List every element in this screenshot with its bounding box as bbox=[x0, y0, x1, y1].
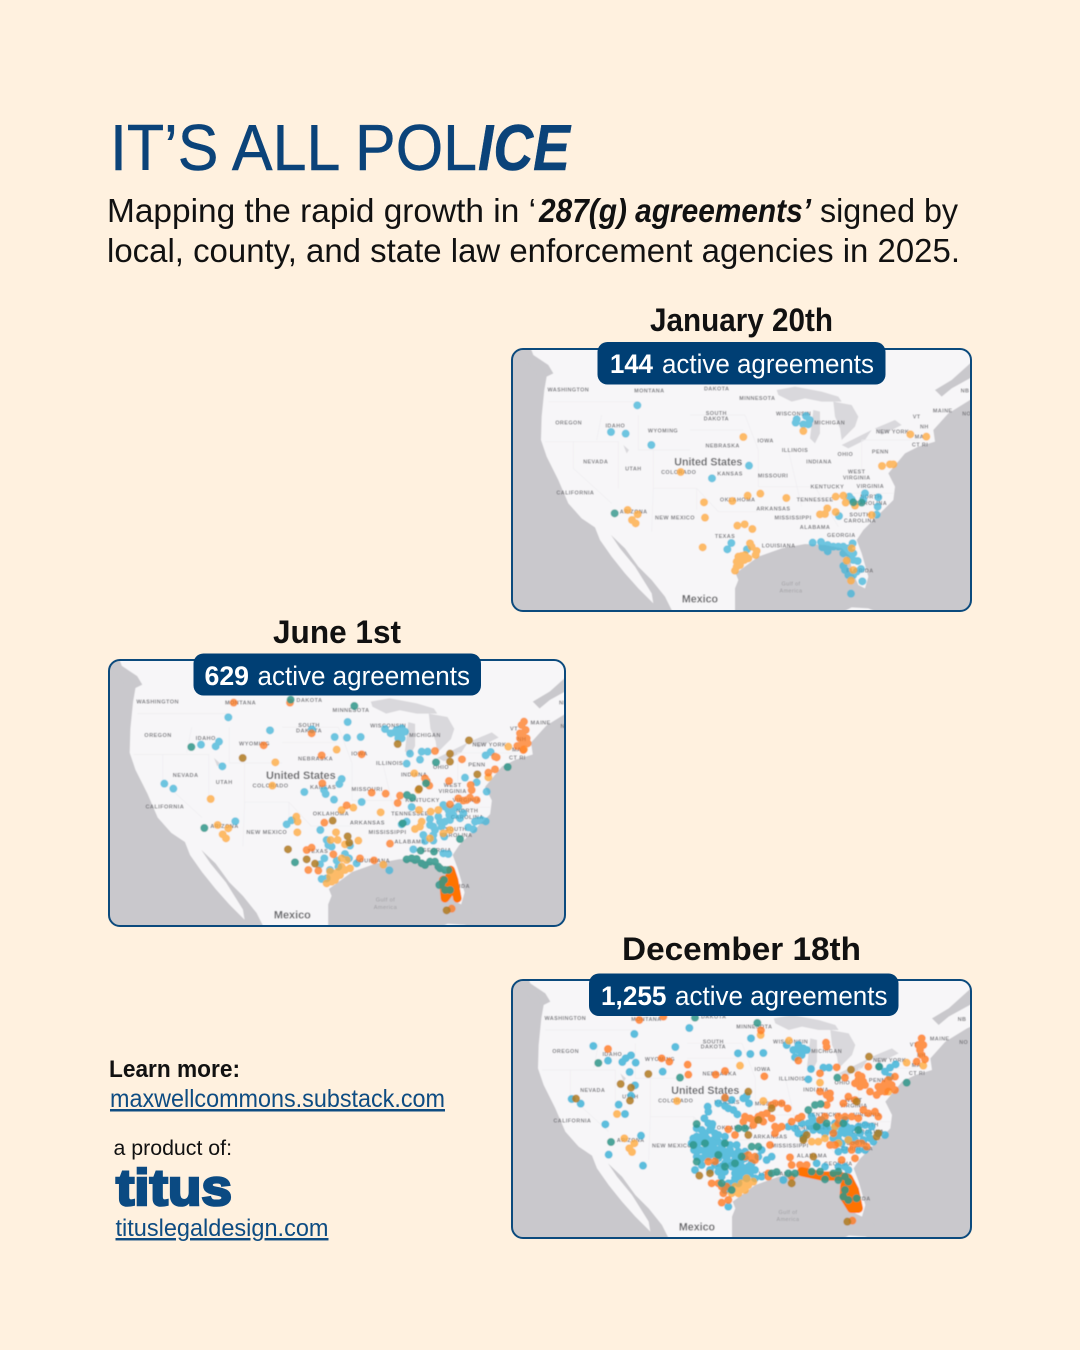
state labels: CALIFORNIA bbox=[556, 490, 594, 496]
state labels: IOWA bbox=[351, 752, 368, 758]
state labels: DAKOTA bbox=[704, 386, 729, 392]
state labels: WYOMING bbox=[648, 429, 678, 435]
state labels: CT RI bbox=[909, 1071, 925, 1077]
state labels: TENNESSEE bbox=[391, 811, 429, 817]
state labels: KENTUCKY bbox=[810, 484, 844, 490]
state labels: Gulf of bbox=[782, 582, 801, 588]
state labels: GEORGIA bbox=[827, 533, 856, 539]
pill: 629 active agreements bbox=[194, 654, 481, 696]
state labels: DAKOTA bbox=[704, 416, 729, 422]
state labels: America bbox=[780, 589, 803, 595]
state labels: TEXAS bbox=[308, 849, 328, 855]
state labels: OKLAHOMA bbox=[313, 811, 349, 817]
subtitle: Mapping the rapid growth in ‘ bbox=[107, 193, 536, 230]
state labels: United States bbox=[671, 1085, 739, 1097]
state labels: OHIO bbox=[835, 1080, 850, 1086]
state labels: WASHINGTON bbox=[136, 699, 179, 705]
state labels: MONTANA bbox=[634, 389, 665, 395]
state labels: WISCONSIN bbox=[370, 724, 406, 730]
state labels: WISCONSIN bbox=[773, 1040, 808, 1046]
state labels: KANSAS bbox=[310, 785, 336, 791]
state labels: NO bbox=[959, 1040, 969, 1046]
panel: December map bbox=[511, 974, 972, 1239]
state labels: NEVADA bbox=[173, 773, 198, 779]
agreement dots bbox=[164, 700, 528, 910]
state labels: NORTH bbox=[857, 1123, 879, 1129]
state labels: ARKANSAS bbox=[350, 821, 385, 827]
state labels: SOUTH bbox=[706, 411, 727, 417]
state labels: CAROLINA bbox=[440, 833, 472, 839]
state labels: ARKANSAS bbox=[756, 506, 790, 512]
title: IT’S ALL POL bbox=[110, 112, 477, 184]
state labels: SOUTH bbox=[298, 723, 320, 729]
subtitle: signed by bbox=[820, 193, 958, 230]
state labels: CAROLINA bbox=[852, 1129, 884, 1135]
state labels bbox=[136, 698, 570, 922]
state labels: NB bbox=[961, 389, 969, 395]
state labels: WISCONSIN bbox=[776, 411, 811, 417]
pill: 1,255 active agreements: 1,255 bbox=[601, 981, 666, 1011]
state labels: NO bbox=[962, 412, 972, 418]
state labels: America bbox=[374, 905, 398, 911]
heading: January 20th: January 20th bbox=[650, 302, 833, 338]
state labels: NEBRASKA bbox=[298, 756, 333, 762]
panel: January map bbox=[511, 342, 972, 612]
state labels: UTAH bbox=[625, 466, 642, 472]
state labels: MINNESOTA bbox=[333, 708, 369, 714]
agreement dots bbox=[611, 405, 926, 594]
state labels: LOUISIANA bbox=[759, 1172, 793, 1178]
state labels: OHIO bbox=[433, 765, 449, 771]
base map bbox=[513, 350, 970, 610]
state labels: ARIZONA bbox=[210, 824, 239, 830]
state labels: VT bbox=[910, 1043, 918, 1049]
pill: 1,255 active agreements bbox=[589, 974, 898, 1016]
state labels: MISSOURI bbox=[755, 1102, 785, 1108]
state labels: DAKOTA bbox=[701, 1015, 726, 1021]
state labels: VIRGINIA bbox=[452, 798, 481, 804]
state labels: LOUISIANA bbox=[762, 543, 796, 549]
state labels: MONTANA bbox=[631, 1017, 662, 1023]
state labels: NH bbox=[517, 737, 526, 743]
state labels: PENN bbox=[468, 763, 485, 769]
state labels: FLORIDA bbox=[843, 1197, 871, 1203]
state labels: PENN bbox=[869, 1078, 886, 1084]
state labels bbox=[547, 386, 972, 605]
pill: 144 active agreements: 144 bbox=[610, 349, 653, 379]
state labels: MA bbox=[512, 747, 522, 753]
pill: 629 active agreements: active agreements bbox=[258, 661, 470, 691]
state labels: CT RI bbox=[509, 756, 526, 762]
state labels: DAKOTA bbox=[296, 729, 322, 735]
title: ICE bbox=[478, 112, 572, 184]
state labels: MISSISSIPPI bbox=[774, 515, 812, 521]
state labels: ARIZONA bbox=[617, 1138, 645, 1144]
state labels: NEW MEXICO bbox=[652, 1144, 692, 1150]
state labels: COLORADO bbox=[253, 784, 289, 790]
map frame bbox=[109, 660, 565, 926]
state labels: PENN bbox=[872, 450, 889, 456]
state labels: INDIANA bbox=[806, 459, 832, 465]
state labels: OHIO bbox=[838, 452, 853, 458]
state labels: UTAH bbox=[216, 780, 233, 786]
logo: titus: titus bbox=[116, 1159, 232, 1216]
state labels: IDAHO bbox=[196, 736, 216, 742]
state labels: MAINE bbox=[930, 1037, 949, 1043]
state labels: MONTANA bbox=[225, 700, 256, 706]
state labels: CALIFORNIA bbox=[553, 1119, 591, 1125]
state labels: MISSOURI bbox=[758, 473, 788, 479]
state labels: United States bbox=[266, 770, 336, 782]
state labels bbox=[544, 1015, 969, 1234]
state labels: NB bbox=[958, 1017, 966, 1023]
state labels: VT bbox=[510, 727, 518, 733]
state labels: MINNESOTA bbox=[736, 1024, 772, 1030]
state labels: WEST bbox=[444, 783, 462, 789]
state labels: IOWA bbox=[758, 439, 774, 445]
state labels: MICHIGAN bbox=[814, 421, 845, 427]
state labels: CAROLINA bbox=[841, 1147, 873, 1153]
state labels: Mexico bbox=[682, 593, 719, 605]
state labels: GEORGIA bbox=[422, 848, 452, 854]
state labels: SOUTH bbox=[846, 1141, 868, 1147]
state labels: WYOMING bbox=[645, 1057, 675, 1063]
state labels: FLORIDA bbox=[442, 884, 470, 890]
state labels: NEW MEXICO bbox=[655, 515, 695, 521]
state labels: OKLAHOMA bbox=[717, 1126, 752, 1132]
pill: 144 active agreements: active agreements bbox=[662, 349, 874, 379]
pill: 629 active agreements: 629 bbox=[204, 661, 249, 691]
state labels: TEXAS bbox=[712, 1162, 732, 1168]
state labels: ALABAMA bbox=[800, 525, 830, 531]
state labels: NB bbox=[559, 700, 568, 706]
subtitle: 287(g) agreements’ bbox=[538, 193, 812, 230]
state labels: Mexico bbox=[679, 1222, 716, 1234]
state labels: CAROLINA bbox=[855, 501, 887, 507]
state labels: WEST bbox=[845, 1098, 863, 1104]
state labels: CT RI bbox=[912, 443, 928, 449]
state labels: NEW YORK bbox=[873, 1058, 906, 1064]
state labels: GEORGIA bbox=[824, 1161, 853, 1167]
state labels: America bbox=[777, 1217, 800, 1223]
state labels: NEW MEXICO bbox=[246, 830, 287, 836]
state labels: TEXAS bbox=[715, 534, 735, 540]
state labels: OKLAHOMA bbox=[720, 497, 755, 503]
map frame bbox=[512, 349, 971, 611]
state labels: MA bbox=[912, 1063, 921, 1069]
state labels: NH bbox=[917, 1053, 926, 1059]
state labels: SOUTH bbox=[703, 1039, 724, 1045]
state labels: SOUTH bbox=[445, 827, 467, 833]
map frame bbox=[512, 980, 971, 1238]
state labels: MISSISSIPPI bbox=[771, 1144, 809, 1150]
state labels: MAINE bbox=[933, 408, 952, 414]
state labels: OREGON bbox=[552, 1049, 579, 1055]
state labels: WASHINGTON bbox=[547, 388, 589, 394]
link: titus legal design: tituslegaldesign.com bbox=[116, 1215, 328, 1242]
state labels: UTAH bbox=[622, 1095, 639, 1101]
state labels: CAROLINA bbox=[844, 518, 876, 524]
state labels: IDAHO bbox=[605, 424, 626, 430]
state labels: ALABAMA bbox=[394, 840, 426, 846]
state labels: NEVADA bbox=[583, 460, 608, 466]
state labels: TENNESSEE bbox=[794, 1126, 830, 1132]
pill: 144 active agreements bbox=[598, 342, 886, 384]
heading: June 1st: June 1st bbox=[273, 614, 401, 650]
pill: 1,255 active agreements: active agreements bbox=[675, 981, 888, 1011]
state labels: WEST bbox=[848, 470, 866, 476]
state labels: KANSAS bbox=[714, 1100, 740, 1106]
state labels: ALABAMA bbox=[797, 1153, 827, 1159]
state labels: MISSISSIPPI bbox=[369, 830, 406, 836]
state labels: MICHIGAN bbox=[811, 1049, 842, 1055]
state labels: MA bbox=[915, 435, 924, 441]
state labels: NORTH bbox=[456, 808, 478, 814]
base map bbox=[513, 981, 970, 1237]
state labels: WYOMING bbox=[239, 741, 270, 747]
state labels: NEVADA bbox=[580, 1088, 605, 1094]
state labels: FLORIDA bbox=[846, 568, 874, 574]
state labels: WASHINGTON bbox=[544, 1016, 586, 1022]
state labels: COLORADO bbox=[658, 1098, 694, 1104]
state labels: IOWA bbox=[755, 1067, 771, 1073]
agreement dots bbox=[572, 1017, 925, 1222]
state labels: OREGON bbox=[555, 421, 582, 427]
state labels: IDAHO bbox=[602, 1052, 623, 1058]
learn more heading: Learn more: bbox=[109, 1056, 240, 1083]
state labels: NEW YORK bbox=[876, 430, 909, 436]
state labels: LOUISIANA bbox=[356, 858, 390, 864]
state labels: DAKOTA bbox=[296, 698, 322, 704]
base map bbox=[110, 661, 564, 925]
state labels: MICHIGAN bbox=[409, 733, 441, 739]
panel: June map bbox=[108, 654, 566, 927]
state labels: ILLINOIS bbox=[779, 1076, 805, 1082]
subtitle bbox=[107, 193, 960, 270]
state labels: CAROLINA bbox=[451, 815, 484, 821]
state labels: NEBRASKA bbox=[706, 443, 740, 449]
state labels: INDIANA bbox=[803, 1088, 829, 1094]
state labels: NH bbox=[920, 425, 929, 431]
state labels: ILLINOIS bbox=[376, 761, 403, 767]
state labels: CALIFORNIA bbox=[145, 804, 184, 810]
state labels: DAKOTA bbox=[701, 1045, 726, 1051]
state labels: TENNESSEE bbox=[797, 497, 833, 503]
subtitle: local, county, and state law enforcement agencies in 2025. bbox=[107, 233, 960, 270]
state labels: KANSAS bbox=[717, 472, 743, 478]
state labels: Gulf of bbox=[376, 898, 395, 904]
state labels: SOUTH bbox=[849, 513, 871, 519]
state labels: VIRGINIA bbox=[854, 1112, 881, 1118]
state labels: NEW YORK bbox=[472, 742, 506, 748]
state labels: NO bbox=[561, 724, 570, 730]
state labels: MAINE bbox=[531, 721, 551, 727]
state labels: KENTUCKY bbox=[807, 1113, 841, 1119]
state labels: United States bbox=[674, 457, 742, 469]
state labels: Mexico bbox=[274, 910, 311, 922]
state labels: VIRGINIA bbox=[843, 475, 870, 481]
state labels: OREGON bbox=[144, 733, 172, 739]
heading: December 18th: December 18th bbox=[622, 931, 861, 967]
state labels: MINNESOTA bbox=[739, 396, 775, 402]
state labels: INDIANA bbox=[401, 773, 427, 779]
state labels: NORTH bbox=[860, 494, 882, 500]
link: substack: maxwellcommons.substack.com bbox=[110, 1085, 445, 1113]
state labels: COLORADO bbox=[661, 470, 697, 476]
state labels: VIRGINIA bbox=[857, 484, 884, 490]
state labels: NEBRASKA bbox=[703, 1072, 737, 1078]
state labels: VIRGINIA bbox=[840, 1104, 867, 1110]
state labels: ARIZONA bbox=[620, 510, 648, 516]
state labels: KENTUCKY bbox=[405, 798, 440, 804]
state labels: ARKANSAS bbox=[753, 1135, 787, 1141]
state labels: VIRGINIA bbox=[439, 789, 467, 795]
product label: a product of: bbox=[114, 1136, 232, 1160]
state labels: ILLINOIS bbox=[782, 448, 808, 454]
state labels: Gulf of bbox=[779, 1210, 798, 1216]
state labels: VT bbox=[913, 414, 921, 420]
state labels: MISSOURI bbox=[352, 787, 383, 793]
